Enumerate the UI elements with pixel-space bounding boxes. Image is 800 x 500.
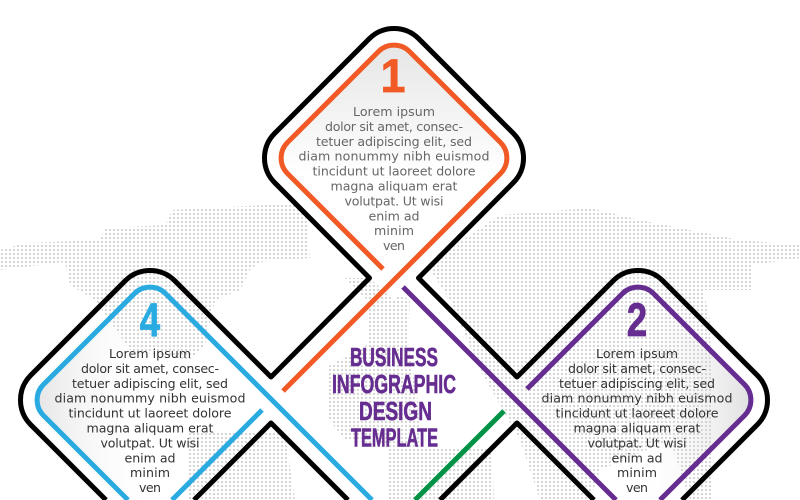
panel 2 text: ven (626, 480, 648, 495)
panel 2 text: volutpat. Ut wisi (588, 436, 686, 450)
panel 4 text: diam nonummy nibh euismod (54, 390, 246, 406)
panel 1 text: tincidunt ut laoreet dolore (312, 164, 476, 178)
panel 1 text: enim ad (368, 208, 420, 224)
panel 4 text (54, 346, 246, 495)
panel 2 number: 2 (627, 294, 647, 346)
panel 4 text: dolor sit amet, consec- (81, 361, 219, 376)
panel 2 text: tincidunt ut laoreet dolore (556, 406, 719, 420)
panel 4 text: minim (130, 465, 170, 480)
panel 4 text: enim ad (124, 450, 176, 466)
panel 2 text: diam nonummy nibh euismod (542, 390, 732, 406)
title: BUSINESS (350, 344, 438, 372)
panel 1 text: magna aliquam erat (330, 178, 458, 194)
panel 4 text: tetuer adipiscing elit, sed (72, 376, 228, 391)
panel 1 text: dolor sit amet, consec- (325, 119, 463, 134)
panel 1 number: 1 (381, 50, 405, 102)
panel fill: top diamond (264, 28, 524, 300)
title: TEMPLATE (351, 424, 438, 452)
orange outline: panel 1 (281, 45, 507, 391)
panel 4 text: Lorem ipsum (109, 346, 191, 361)
panel 4 text: volutpat. Ut wisi (100, 436, 200, 450)
title: DESIGN (359, 398, 432, 426)
purple outline: panel 2, corner stroke (527, 287, 751, 500)
panel 1 text: Lorem ipsum (353, 104, 435, 119)
panel 2 text: Lorem ipsum (596, 346, 678, 361)
panel 4 text: magna aliquam erat (86, 420, 214, 436)
blue outline: panel 4, short stroke (172, 410, 262, 500)
panel 2 text: tetuer adipiscing elit, sed (559, 376, 715, 391)
panel 4 text: tincidunt ut laoreet dolore (68, 406, 232, 420)
panel fill: top diamond gradient (281, 45, 507, 280)
panel 1 text: diam nonummy nibh euismod (298, 148, 490, 164)
panel 2 text: dolor sit amet, consec- (568, 361, 706, 376)
purple outline: panel 2, long stroke (403, 287, 616, 500)
blue outline: panel 4, corner stroke (37, 287, 372, 500)
panel 2 text (542, 346, 732, 495)
panel 1 text: ven (383, 238, 405, 253)
panel 4 number: 4 (140, 294, 161, 346)
panel 1 text: volutpat. Ut wisi (344, 194, 444, 208)
panel 2 text: magna aliquam erat (574, 420, 701, 436)
panel 4 text: ven (139, 480, 161, 495)
panel 1 text: tetuer adipiscing elit, sed (316, 134, 472, 149)
green outline: panel 3 (415, 411, 504, 500)
dotted world map background (0, 203, 800, 500)
panel 2 text: minim (617, 465, 657, 480)
panel fill: left diamond (37, 287, 272, 500)
panel fill: right diamond (516, 287, 751, 500)
panel 2 text: enim ad (612, 450, 662, 466)
panel 1 text (298, 104, 490, 253)
title (332, 344, 456, 452)
panel 1 text: minim (374, 223, 414, 238)
black outer frame, lower edge (194, 423, 594, 500)
title: INFOGRAPHIC (332, 371, 456, 399)
